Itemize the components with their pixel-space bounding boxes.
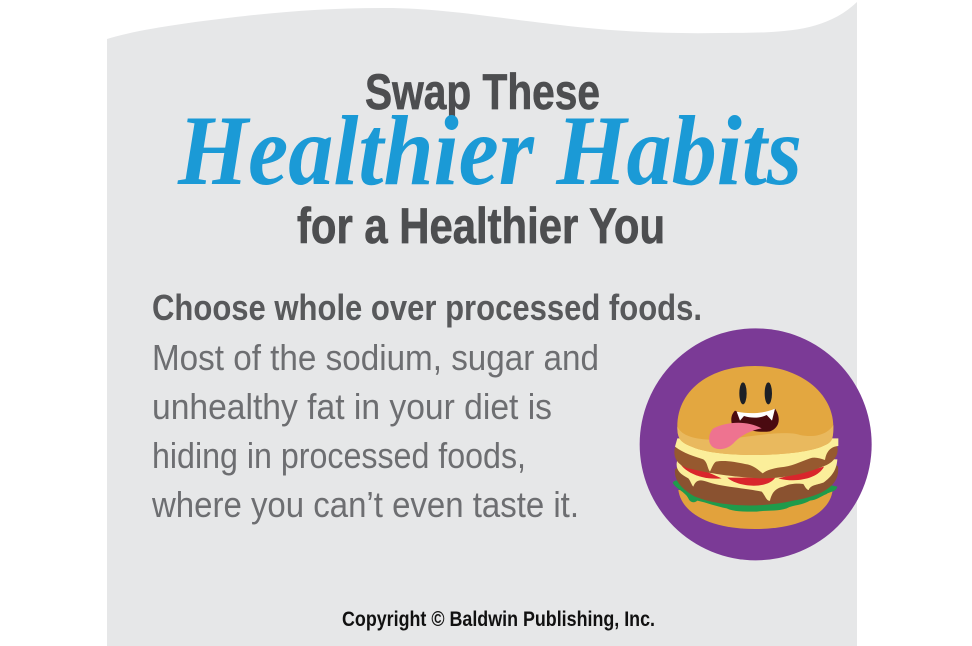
heading: Swap These: Swap These — [365, 64, 600, 120]
upper patty — [674, 443, 838, 478]
heading: Healthier Habits: Healthier Habits — [177, 95, 802, 206]
text block: tip body: unhealthy fat in your diet is — [152, 386, 552, 427]
tomato slices — [678, 459, 722, 479]
text block: tip body — [151, 337, 599, 525]
lower cheese — [677, 457, 837, 501]
face: mouth — [731, 409, 779, 432]
text block: tip heading: Choose whole over processed foods. — [152, 287, 702, 328]
icon: burger in purple circle — [640, 328, 872, 560]
top cheese — [675, 438, 838, 473]
top bun — [677, 366, 833, 455]
panel: gray wavy background — [107, 2, 857, 646]
copyright: Copyright © Baldwin Publishing, Inc. — [342, 608, 655, 631]
lettuce — [673, 480, 837, 512]
bottom bun — [678, 490, 833, 529]
face: eyes — [739, 382, 747, 404]
lower patty — [675, 461, 838, 505]
text block: tip body: Most of the sodium, sugar and — [152, 337, 599, 378]
text block: tip body: hiding in processed foods, — [152, 435, 526, 476]
heading: for a Healthier You: for a Healthier You — [297, 198, 665, 254]
text block: tip body: where you can’t even taste it. — [151, 484, 579, 525]
face: tongue — [709, 423, 762, 449]
purple circle — [640, 328, 872, 560]
